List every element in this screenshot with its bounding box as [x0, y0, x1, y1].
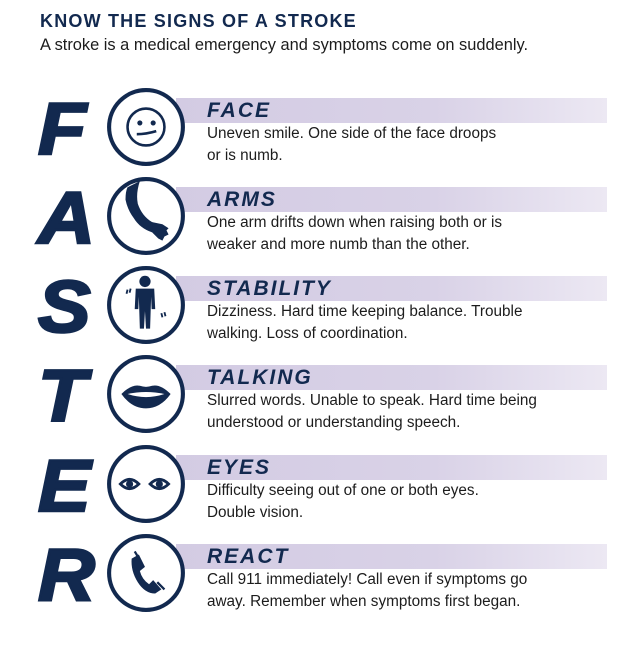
- row: face: [38, 88, 607, 170]
- text: [207, 125, 496, 164]
- row: talking: [38, 355, 607, 437]
- text: [207, 303, 522, 342]
- letter T: T: [38, 356, 86, 437]
- subtitle: A stroke is a medical emergency and symptoms come on suddenly.: [40, 36, 528, 54]
- row: arms: [34, 177, 607, 259]
- heading: TALKING: [207, 366, 313, 389]
- letter S: S: [38, 267, 91, 348]
- text: weaker and more numb than the other.: [207, 236, 470, 253]
- band: [176, 544, 607, 569]
- icon: person: [107, 266, 185, 344]
- text: away. Remember when symptoms first began.: [207, 593, 520, 610]
- heading: ARMS: [207, 188, 277, 211]
- icon: eyes: [107, 445, 185, 523]
- letter R: R: [38, 535, 95, 616]
- text: Call 911 immediately! Call even if symptoms go: [207, 571, 527, 588]
- icon: phone: [107, 534, 185, 612]
- text: [207, 392, 537, 431]
- heading: REACT: [207, 545, 289, 568]
- icon: arm: [107, 177, 185, 255]
- text: Slurred words. Unable to speak. Hard time being: [207, 392, 537, 409]
- band: [176, 98, 607, 123]
- title: KNOW THE SIGNS OF A STROKE: [40, 11, 357, 31]
- text: [207, 482, 479, 521]
- row: react: [38, 534, 607, 616]
- text: Uneven smile. One side of the face droops: [207, 125, 496, 142]
- text: [207, 571, 527, 610]
- band: [176, 187, 607, 212]
- letter F: F: [38, 89, 86, 170]
- text: understood or understanding speech.: [207, 414, 460, 431]
- text: Dizziness. Hard time keeping balance. Trouble: [207, 303, 522, 320]
- row: stability: [37, 266, 607, 348]
- letter E: E: [38, 446, 91, 527]
- heading: STABILITY: [207, 277, 332, 300]
- text: One arm drifts down when raising both or is: [207, 214, 502, 231]
- band: [176, 455, 607, 480]
- text: Difficulty seeing out of one or both eyes.: [207, 482, 479, 499]
- text: Double vision.: [207, 504, 303, 521]
- icon: smiley: [107, 88, 185, 166]
- band: [176, 365, 607, 390]
- text: [207, 214, 502, 253]
- heading: FACE: [207, 99, 271, 122]
- letter A: A: [38, 178, 95, 259]
- text: or is numb.: [207, 147, 283, 164]
- band: [176, 276, 607, 301]
- icon: lips: [107, 355, 185, 433]
- heading: EYES: [207, 456, 271, 479]
- text: walking. Loss of coordination.: [207, 325, 408, 342]
- row: eyes: [38, 445, 607, 527]
